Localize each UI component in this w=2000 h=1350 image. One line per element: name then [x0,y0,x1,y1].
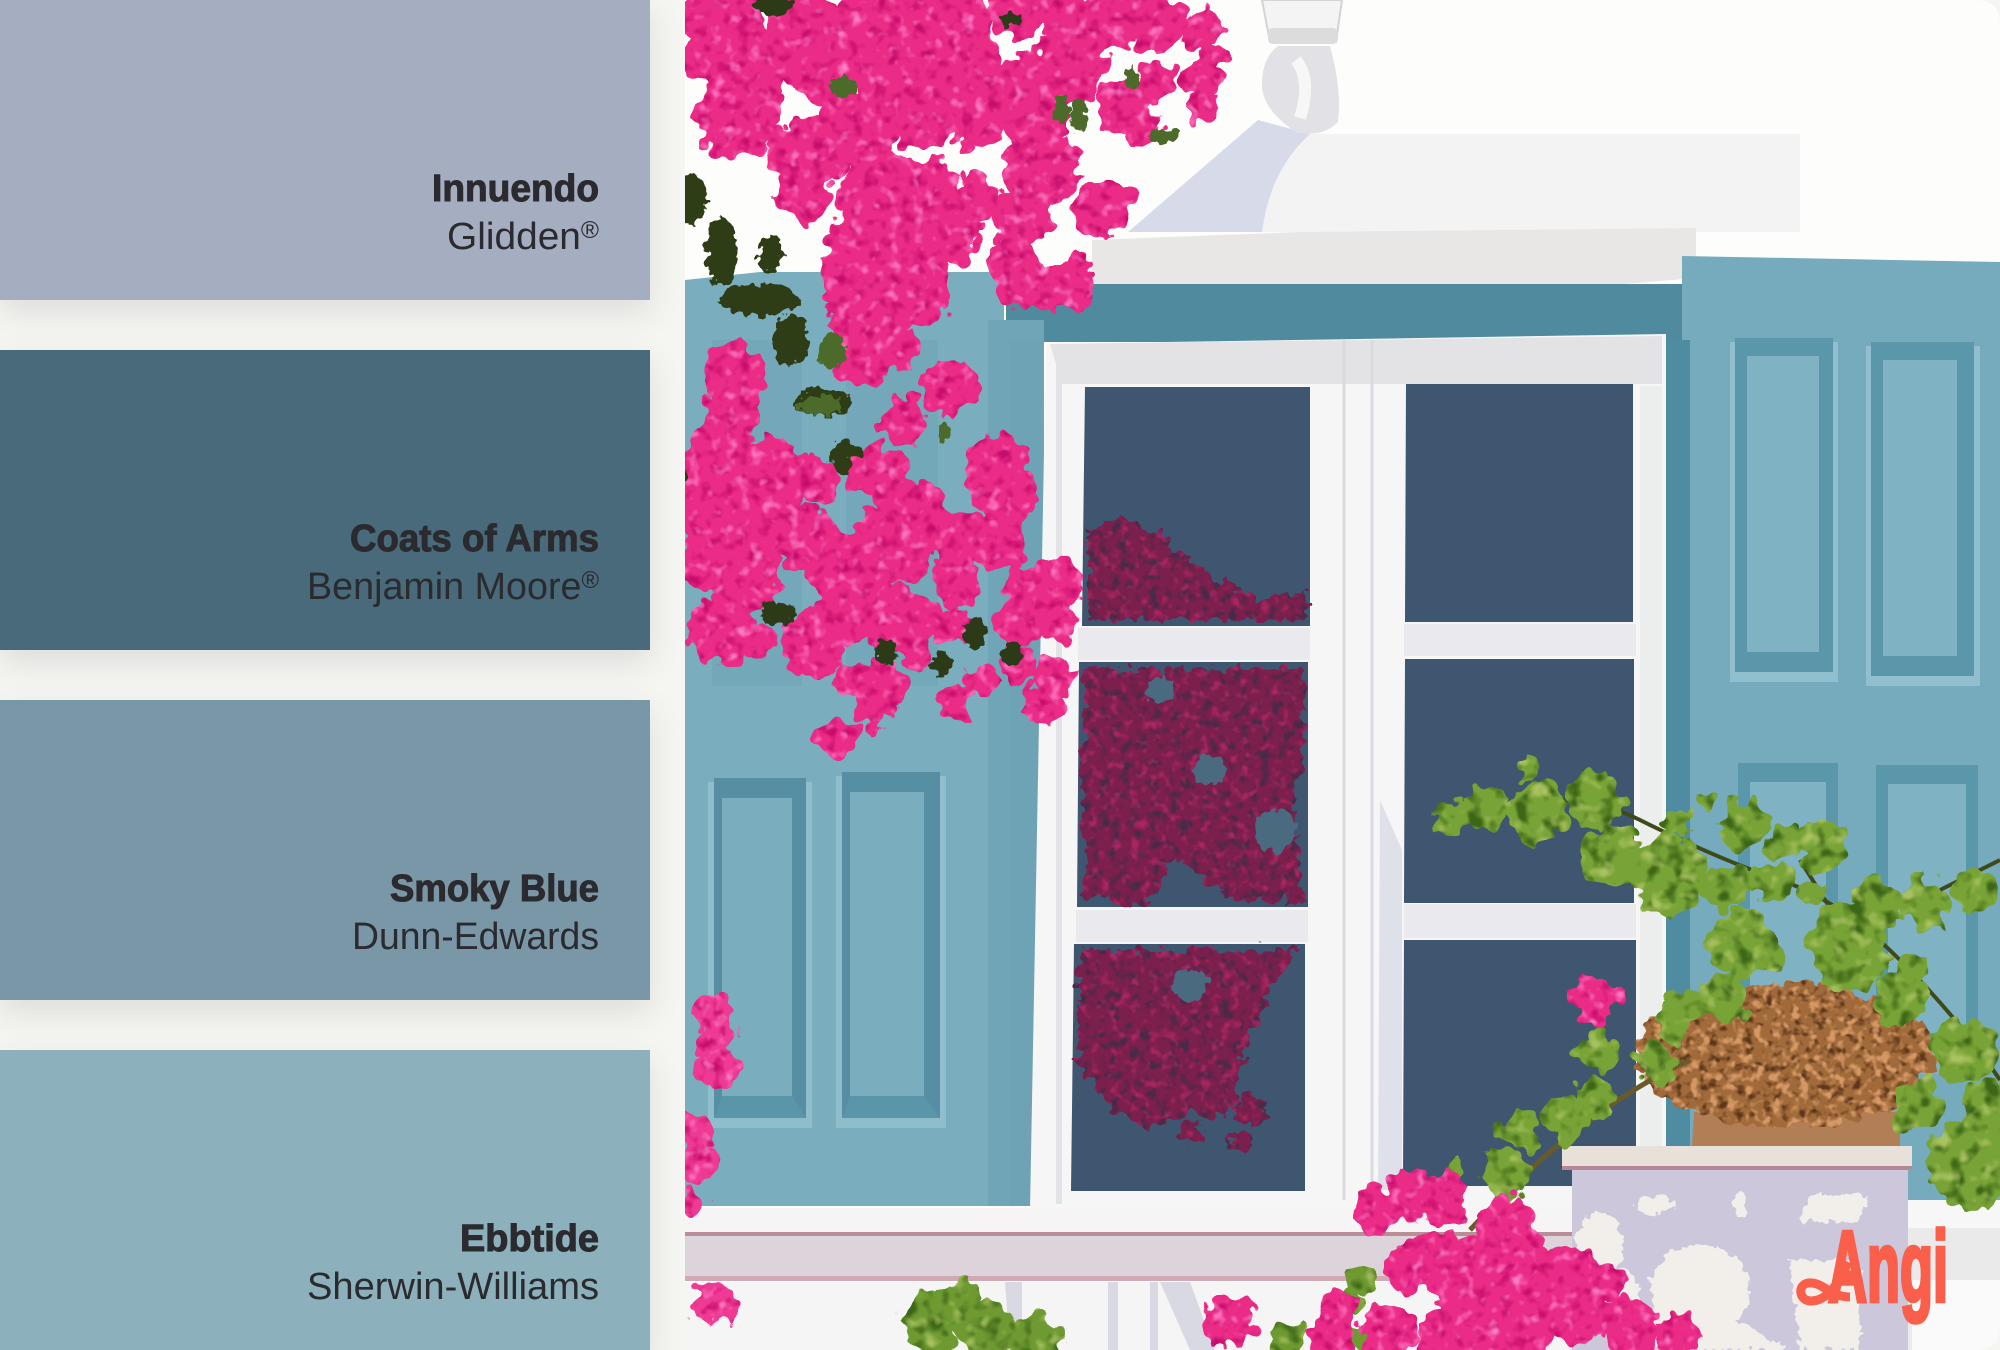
logo: Angi [1796,1226,1946,1325]
dark leaves over flowers [753,0,1178,676]
photo: white house window with blue shutters and bougainvillea [685,0,2000,1350]
window rails [1076,624,1636,942]
wall [685,0,2000,1350]
bottom magenta flowers [1208,980,1700,1350]
bottom bush leaves [900,1266,1474,1350]
swatch label: Coats of Arms: Benjamin Moore [307,566,584,608]
swatch label: Coats of Arms: Coats of Arms [350,518,599,560]
swatch label: Coats of Arms [307,518,599,608]
panel: Innuendo swatch [0,0,650,300]
swatch label: Ebbtide: Sherwin-Williams [307,1266,599,1308]
dried brown flower cluster [1636,983,1936,1127]
swatch label: Smoky Blue [352,868,599,958]
swatch label: Ebbtide: Ebbtide [460,1218,599,1260]
lamp shadow [1128,120,1310,232]
swatch label: Innuendo: Innuendo [432,168,599,210]
lintel [1006,284,1686,342]
magenta bougainvillea: upper cluster [686,0,1222,381]
swatch label: Innuendo [432,168,599,258]
swatch label: Innuendo: ® [581,217,599,244]
left shutter lower panel two [836,772,946,1128]
flower reflection in panes [1078,516,1306,1150]
right shutter [1666,256,2000,1200]
swatch label: Smoky Blue: Smoky Blue [390,868,599,910]
panel: Coats of Arms swatch [0,350,650,650]
balusters [1005,1282,1215,1350]
window panes [1071,384,1636,1191]
planter [1562,1146,1912,1350]
left shutter upper panels [712,340,938,686]
left shutter [685,272,1044,1206]
magenta bougainvillea: lower cluster [682,346,1078,752]
right shutter upper panel one [1730,338,1838,682]
right shutter upper panel two [1866,342,1980,686]
panel: Smoky Blue swatch [0,700,650,1000]
swatch label: Innuendo: Glidden [447,216,578,258]
planter dappled light [1576,1191,1870,1350]
right sill [1908,1228,2000,1350]
dark leaves behind top bougainvillea [679,173,862,506]
swatch label: Coats of Arms: ® [581,567,599,594]
wall shade above cornice [1262,134,1800,232]
wall lamp [1262,0,1342,134]
pot [1692,1112,1900,1146]
swatch label: Ebbtide [307,1218,599,1308]
pane reflection blue gaps [1146,676,1297,1003]
cornice [1092,228,1696,286]
panel: Ebbtide swatch [0,1050,650,1350]
right shutter lower panels [1738,763,1978,1074]
sill [685,1208,1585,1350]
swatch label: Smoky Blue: Dunn-Edwards [352,916,599,958]
vine stems [1470,800,2000,1230]
left edge small flowers [676,990,738,1327]
green vine leaves [1438,759,2000,1206]
left shutter lower panel one [708,778,812,1128]
window frame [1030,334,1666,1210]
